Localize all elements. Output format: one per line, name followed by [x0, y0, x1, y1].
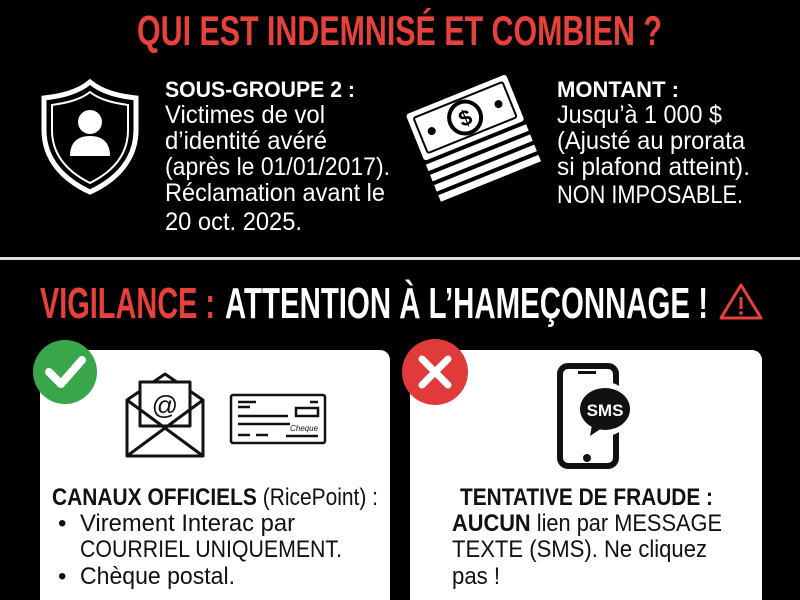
icon: red cross — [402, 339, 468, 405]
icon: green check — [33, 340, 97, 404]
icon: envelope: @ — [152, 390, 178, 420]
text: canaux officiels — [52, 484, 378, 590]
text block: montant: MONTANT : — [557, 77, 679, 102]
icon: money stack — [406, 74, 541, 202]
text: canaux officiels: COURRIEL UNIQUEMENT. — [80, 536, 342, 563]
text: tentative de fraude: AUCUN lien par MESSAGE — [452, 510, 722, 537]
text block: montant — [557, 77, 750, 209]
text block: sous-groupe 2: 20 oct. 2025. — [165, 208, 302, 236]
icon: money stack: $ — [455, 104, 476, 132]
heading: vigilance: VIGILANCE : — [40, 279, 215, 328]
text: canaux officiels: Chèque postal. — [80, 563, 235, 590]
text: canaux officiels: • — [58, 510, 66, 537]
text block: sous-groupe 2: Victimes de vol — [165, 101, 325, 129]
text: tentative de fraude: TENTATIVE DE FRAUDE : — [460, 484, 713, 511]
icon: phone with SMS — [560, 366, 632, 466]
text: tentative de fraude: TEXTE (SMS). Ne cliquez — [452, 536, 707, 563]
heading: vigilance — [40, 278, 708, 328]
text block: montant: si plafond atteint). — [557, 153, 750, 181]
text: tentative de fraude: pas ! — [452, 563, 500, 590]
text: canaux officiels: CANAUX OFFICIELS (RicePoint) : — [52, 484, 378, 511]
text block: montant: (Ajusté au prorata — [557, 127, 745, 155]
icon: cheque — [231, 395, 325, 443]
text block: sous-groupe 2 — [165, 77, 390, 236]
text: canaux officiels: • — [58, 563, 66, 590]
text block: montant: NON IMPOSABLE. — [557, 181, 743, 209]
text block: montant: Jusqu’à 1 000 $ — [557, 101, 722, 129]
text block: sous-groupe 2: d’identité avéré — [165, 127, 327, 155]
panel: fraud attempt — [410, 350, 762, 600]
icon: phone with SMS: SMS — [587, 401, 623, 420]
icon: envelope — [127, 374, 203, 456]
icon: cheque: Cheque — [290, 424, 319, 433]
text: tentative de fraude — [452, 484, 722, 590]
text: canaux officiels: Virement Interac par — [80, 510, 295, 537]
text block: sous-groupe 2: Réclamation avant le — [165, 179, 385, 207]
icon: shield with person — [44, 82, 136, 192]
panel: official channels — [40, 350, 390, 600]
text block: sous-groupe 2: (après le 01/01/2017). — [165, 153, 390, 181]
text block: sous-groupe 2: SOUS-GROUPE 2 : — [165, 77, 355, 102]
icon: warning triangle — [721, 285, 761, 318]
